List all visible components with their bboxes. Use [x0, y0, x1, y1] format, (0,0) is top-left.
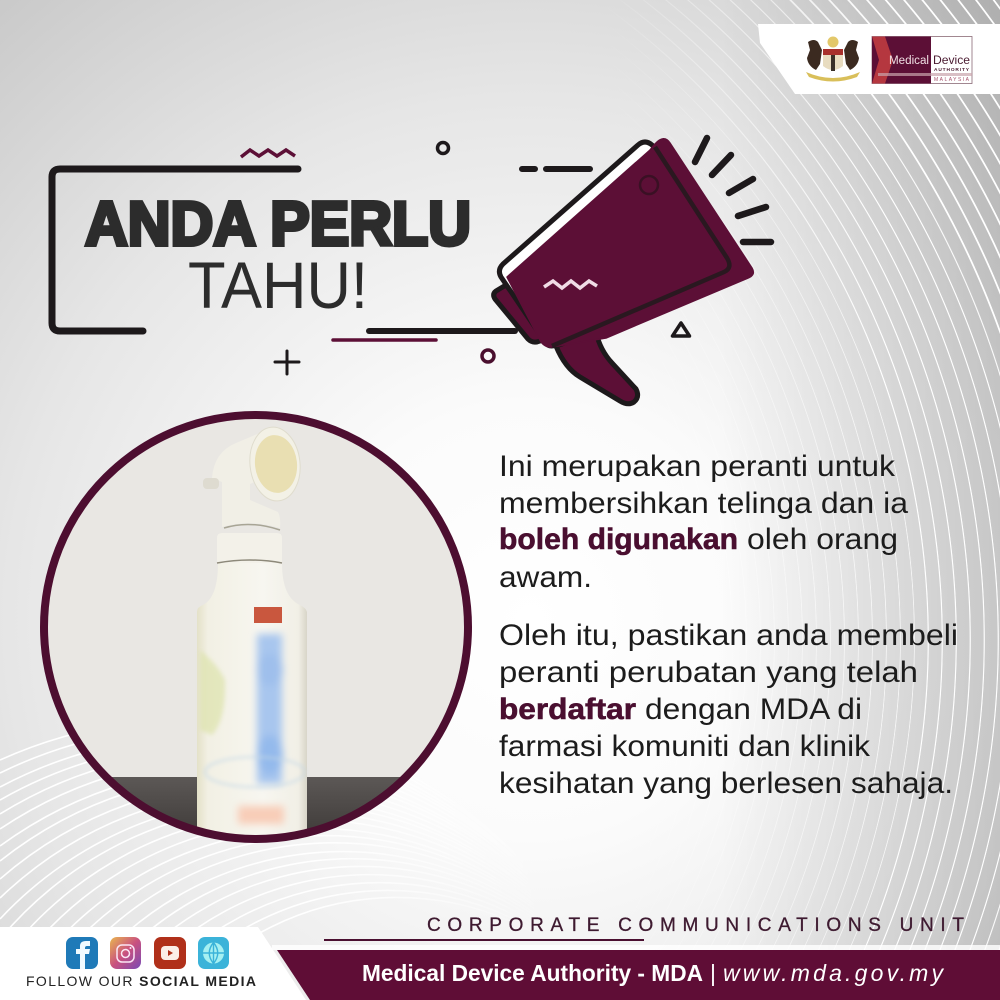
- orange label block: [254, 607, 282, 623]
- body text block: peranti perubatan yang telah: [499, 656, 918, 689]
- side print: [301, 620, 303, 800]
- header logo panel: [758, 24, 1000, 94]
- megaphone rear cap: [494, 285, 548, 342]
- bottle cap: [217, 533, 282, 563]
- sound rays: [695, 138, 771, 242]
- unit label: CORPORATE COMMUNICATIONS UNIT: [427, 915, 964, 936]
- logo: Medical Device Authority: [872, 36, 972, 84]
- icon: youtube: [154, 937, 186, 969]
- collar seam: [224, 524, 280, 530]
- side nub: [203, 478, 219, 489]
- decorative plus: [275, 351, 299, 374]
- body text block: berdaftar: [499, 693, 636, 726]
- photo ring: [44, 415, 468, 839]
- accent rule: [333, 338, 436, 342]
- baseline rule: [369, 328, 515, 334]
- body text block: kesihatan yang berlesen sahaja.: [499, 767, 953, 800]
- collar: [222, 500, 280, 528]
- megaphone cone: [507, 139, 753, 347]
- blurred blue label: [257, 634, 283, 784]
- footer bar: Medical Device Authority - MDA: [362, 960, 703, 986]
- logo: Medical Device Authority: Device: [933, 55, 970, 67]
- cap seam: [217, 560, 282, 563]
- decorative circle top: [438, 142, 448, 154]
- body text block: dengan MDA di: [645, 693, 862, 726]
- heading: ANDA PERLU: ANDA PERLU: [85, 190, 471, 259]
- title frame: [52, 169, 298, 331]
- body text block: awam.: [499, 561, 592, 594]
- megaphone rivet: [640, 176, 658, 194]
- icon: instagram: [110, 937, 141, 969]
- decorative circle maroon: [482, 350, 494, 362]
- body text block: Oleh itu, pastikan anda membeli: [499, 619, 958, 652]
- icon: megaphone: [494, 138, 771, 404]
- follow label: FOLLOW OUR SOCIAL MEDIA: [26, 973, 256, 989]
- body text block: Ini merupakan peranti untuk: [499, 450, 896, 483]
- megaphone handle: [556, 332, 638, 404]
- megaphone inner lines: [552, 147, 729, 346]
- icon: facebook: [66, 937, 98, 969]
- dashes: [522, 166, 590, 172]
- logo: Medical Device Authority: Medical: [889, 55, 929, 67]
- body text block: membersihkan telinga dan ia: [499, 487, 908, 520]
- mouthpiece rim: [249, 426, 300, 502]
- mouthpiece interior: [254, 435, 298, 493]
- bottle body: [197, 563, 307, 843]
- body text block: oleh orang: [747, 523, 898, 556]
- photo: ear-cleaning spray bottle: [44, 415, 468, 843]
- blurred pink label: [238, 806, 284, 824]
- logo: Medical Device Authority: MALAYSIA: [934, 77, 970, 83]
- body text block: boleh digunakan: [499, 523, 738, 556]
- logo: Medical Device Authority: AUTHORITY: [934, 67, 970, 73]
- footer strip highlight: [272, 945, 1000, 950]
- label leaf: [200, 650, 225, 735]
- footer bar: www.mda.gov.my: [723, 960, 944, 986]
- squiggle decoration: [241, 150, 295, 157]
- megaphone squiggle: [544, 281, 597, 288]
- decorative triangle: [672, 323, 690, 336]
- table: [112, 777, 400, 829]
- water ripple: [205, 757, 305, 787]
- footer bar: [277, 950, 1000, 1000]
- icon: website globe: [198, 937, 229, 969]
- icon: Malaysia coat of arms: [806, 36, 860, 82]
- body text block: [499, 450, 958, 800]
- elbow tube: [212, 432, 282, 510]
- body text block: farmasi komuniti dan klinik: [499, 730, 871, 763]
- social media panel: [0, 927, 306, 1000]
- footer bar: |: [710, 960, 716, 986]
- unit underline: [324, 939, 644, 941]
- heading: TAHU!: TAHU!: [188, 248, 368, 322]
- megaphone outline back: [499, 142, 731, 346]
- wall shading: [44, 415, 468, 777]
